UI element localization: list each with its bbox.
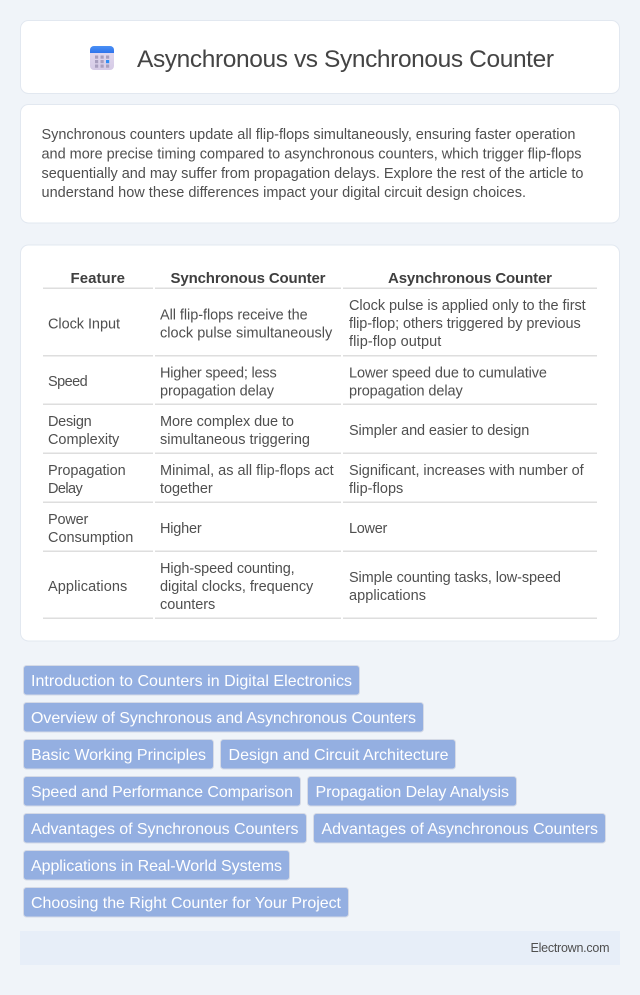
table row: propagation delay bbox=[43, 463, 597, 503]
table row: design complexity: simultaneous triggering bbox=[160, 432, 310, 448]
table row: speed: Higher speed; less bbox=[160, 365, 277, 381]
table row: applications: counters bbox=[160, 597, 215, 613]
table row: propagation delay: Significant, increases with number of bbox=[349, 463, 585, 479]
tag: advantages of synchronous bbox=[24, 814, 306, 843]
introduction text: Synchronous counters update all flip-flops simultaneously, ensuring faster operation bbox=[42, 127, 576, 143]
table row: applications: applications bbox=[349, 588, 426, 604]
table row: power consumption bbox=[43, 512, 597, 552]
table row: clock input bbox=[43, 298, 597, 356]
table row: design complexity: More complex due to bbox=[160, 414, 294, 430]
table row: clock input: All flip-flops receive the bbox=[160, 307, 308, 323]
table row: applications: Simple counting tasks, low-speed bbox=[349, 570, 561, 586]
tag: overview bbox=[24, 702, 424, 732]
topic tags bbox=[24, 666, 606, 917]
table row: power consumption: Power bbox=[48, 512, 88, 528]
tag: advantages of synchronous: Advantages of Synchronous Counters bbox=[31, 821, 298, 838]
table row: propagation delay: Delay bbox=[48, 481, 83, 497]
table row: propagation delay: Propagation bbox=[48, 463, 126, 479]
table header row bbox=[43, 270, 597, 289]
table row: speed bbox=[43, 365, 597, 405]
table row: clock input: Clock pulse is applied only to the first bbox=[349, 298, 586, 314]
table row: speed: Lower speed due to cumulative bbox=[349, 365, 547, 381]
table row: propagation delay: flip-flops bbox=[349, 481, 403, 497]
tag: advantages of asynchronous: Advantages of Asynchronous Counters bbox=[322, 821, 598, 838]
table header row: Feature bbox=[70, 270, 125, 287]
table row: applications: Applications bbox=[48, 579, 127, 595]
table row: clock input: Clock Input bbox=[48, 316, 120, 332]
table row: design complexity: Simpler and easier to design bbox=[349, 423, 529, 439]
table row: clock input: flip-flop; others triggered by previous bbox=[349, 316, 581, 332]
introduction text: understand how these differences impact your digital circuit design choices. bbox=[42, 185, 526, 201]
table row: propagation delay: Minimal, as all flip-flops act bbox=[160, 463, 334, 479]
table row: power consumption: Consumption bbox=[48, 530, 133, 546]
introduction text: sequentially and may suffer from propagation delays. Explore the rest of the article to bbox=[42, 166, 584, 182]
table row: design complexity bbox=[43, 414, 597, 454]
introduction text: and more precise timing compared to asynchronous counters, which trigger flip-flops bbox=[42, 146, 582, 162]
icon: calendar bbox=[90, 46, 114, 70]
table row: applications: digital clocks, frequency bbox=[160, 579, 314, 595]
tag: basic working principles: Basic Working Principles bbox=[31, 747, 206, 764]
introduction text bbox=[42, 127, 584, 201]
tag: applications bbox=[24, 850, 290, 880]
tag: propagation delay analysis: Propagation Delay Analysis bbox=[316, 784, 509, 801]
tag: introduction: Introduction to Counters in Digital Electronics bbox=[31, 673, 352, 690]
table row: power consumption: Lower bbox=[349, 521, 387, 537]
tag: design and circuit architecture: Design and Circuit Architecture bbox=[228, 747, 449, 764]
tag: basic working principles bbox=[24, 740, 214, 769]
table row: speed: propagation delay bbox=[349, 383, 463, 399]
table row: applications bbox=[43, 561, 597, 619]
tag: advantages of asynchronous bbox=[314, 814, 606, 843]
tag: speed and performance: Speed and Performance Comparison bbox=[31, 784, 293, 801]
title: Asynchronous vs Synchronous Counter bbox=[137, 46, 554, 73]
tag: choosing the right counter: Choosing the Right Counter for Your Project bbox=[31, 895, 342, 912]
footer source text: Electrown.com bbox=[530, 941, 610, 955]
tag: propagation delay analysis bbox=[308, 776, 516, 806]
table row: clock input: flip-flop output bbox=[349, 334, 441, 350]
table row: speed: propagation delay bbox=[160, 383, 275, 399]
tag: applications: Applications in Real-World Systems bbox=[31, 858, 282, 875]
table row: design complexity: Complexity bbox=[48, 432, 120, 448]
tag: choosing the right counter bbox=[24, 888, 348, 917]
table row: clock input: clock pulse simultaneously bbox=[160, 325, 333, 341]
table row: speed: Speed bbox=[48, 374, 88, 390]
tag: design and circuit architecture bbox=[220, 740, 456, 769]
table row: applications: High-speed counting, bbox=[160, 561, 295, 577]
tag: speed and performance bbox=[24, 776, 300, 806]
table header row: Asynchronous Counter bbox=[388, 270, 552, 287]
table header row: Synchronous Counter bbox=[170, 270, 326, 287]
table row: power consumption: Higher bbox=[160, 521, 202, 537]
table row: design complexity: Design bbox=[48, 414, 92, 430]
panel: comparison table bbox=[20, 245, 620, 641]
panel: introduction bbox=[20, 104, 620, 223]
panel: header bbox=[20, 20, 620, 94]
tag: overview: Overview of Synchronous and Asynchronous Counters bbox=[31, 710, 416, 727]
table row: propagation delay: together bbox=[160, 481, 213, 497]
footer bbox=[20, 931, 620, 965]
tag: introduction bbox=[24, 666, 360, 695]
